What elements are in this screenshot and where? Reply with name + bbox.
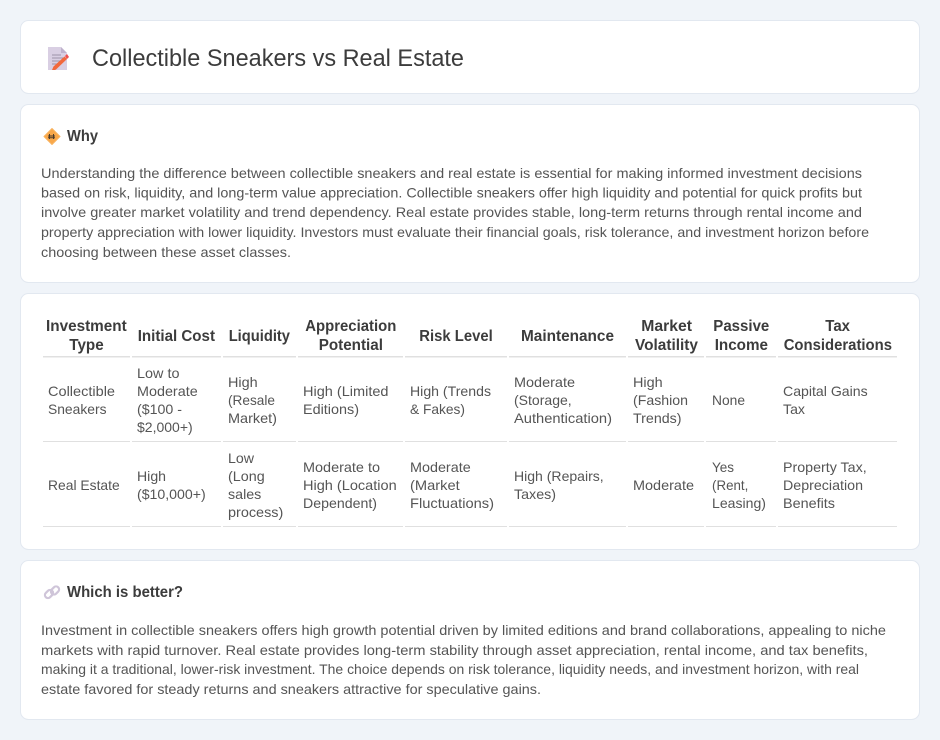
table row: real estate: Leasing) — [712, 495, 766, 511]
why paragraph: property appreciation with lower liquidity. Investors must evaluate their financial goals, risk tolerance, and investment horizon before — [41, 224, 869, 240]
table row: real estate: Real Estate — [48, 477, 120, 493]
table rules — [43, 356, 897, 527]
table header row: Market — [641, 318, 693, 335]
icon: memo with pencil — [48, 47, 69, 70]
table row: collectible sneakers: Authentication) — [514, 410, 612, 426]
table row: collectible sneakers: (Resale — [228, 392, 275, 408]
table row: real estate: Moderate to — [303, 459, 380, 475]
table row: collectible sneakers: (Fashion — [633, 392, 688, 408]
table row: real estate: (Rent, — [712, 477, 748, 493]
table row: real estate: Depreciation — [783, 477, 863, 493]
table header row: Passive — [713, 318, 769, 335]
table header row: Investment — [46, 318, 127, 335]
table row: collectible sneakers: (Storage, — [514, 392, 572, 408]
table header row: Appreciation — [305, 318, 396, 335]
table row: collectible sneakers: Market) — [228, 410, 277, 426]
table row: real estate: Low — [228, 450, 255, 466]
table row: real estate: Property Tax, — [783, 459, 867, 475]
table row: collectible sneakers: Sneakers — [48, 401, 106, 417]
table row: real estate: (Long — [228, 468, 265, 484]
table row: collectible sneakers: ($100 - — [137, 401, 182, 417]
table row: collectible sneakers: Collectible — [48, 383, 115, 399]
table row: real estate: Yes — [712, 459, 734, 475]
why paragraph: choosing between these asset classes. — [41, 244, 291, 260]
panel: which is better — [20, 560, 920, 720]
table row: real estate: High (Repairs, — [514, 468, 604, 484]
table row: collectible sneakers: High (Trends — [410, 383, 491, 399]
table row: real estate: process) — [228, 504, 283, 520]
why paragraph: based on risk, liquidity, and long-term value appreciation. Collectible sneakers offer high liquidity and potential for quick profits but — [41, 184, 862, 200]
heading: which is better: Which is better? — [67, 584, 183, 601]
table row: real estate: sales — [228, 486, 261, 502]
table row: collectible sneakers: Moderate — [514, 374, 575, 390]
icon: orange diamond sign — [44, 128, 60, 144]
table row: real estate: Benefits — [783, 495, 835, 511]
panel: title — [20, 20, 920, 94]
which is better paragraph — [41, 622, 886, 697]
why paragraph — [41, 165, 869, 260]
table row: real estate: Taxes) — [514, 486, 556, 502]
table row: collectible sneakers: Trends) — [633, 410, 682, 426]
table header row: Risk Level — [419, 328, 493, 345]
table header row: Volatility — [635, 337, 698, 354]
table header row: Considerations — [784, 337, 892, 354]
which is better paragraph: Investment in collectible sneakers offers high growth potential driven by limited editions and brand collaborations, appealing to niche — [41, 622, 886, 638]
which is better paragraph: making it a traditional, lower-risk investment. The choice depends on risk tolerance, liquidity needs, and investment horizon, with real — [41, 661, 859, 677]
table header row: Liquidity — [229, 328, 290, 345]
table row: real estate: ($10,000+) — [137, 486, 206, 502]
table row: collectible sneakers: None — [712, 392, 745, 408]
table row: collectible sneakers: Moderate — [137, 383, 198, 399]
table header row: Initial Cost — [138, 328, 216, 345]
table row: real estate: Dependent) — [303, 495, 377, 511]
table row: collectible sneakers: High (Limited — [303, 383, 388, 399]
heading: why: Why — [67, 128, 98, 145]
table row: collectible sneakers: Capital Gains — [783, 383, 868, 399]
table header row: Maintenance — [521, 328, 614, 345]
title text: Collectible Sneakers vs Real Estate — [92, 45, 464, 72]
table header row: Type — [69, 337, 104, 354]
why paragraph: Understanding the difference between collectible sneakers and real estate is essential for making informed investment decisions — [41, 165, 862, 181]
table header row: Tax — [825, 318, 850, 335]
which is better paragraph: estate favored for steady returns and sneakers attractive for speculative gains. — [41, 681, 541, 697]
table row: real estate: Moderate — [633, 477, 694, 493]
table row: collectible sneakers: $2,000+) — [137, 419, 193, 435]
which is better paragraph: markets with rapid turnover. Real estate provides long-term stability through asset appreciation, rental income, and tax benefits, — [41, 642, 868, 658]
table row: collectible sneakers: Editions) — [303, 401, 359, 417]
table row: real estate: High — [137, 468, 166, 484]
table row: real estate: Moderate — [410, 459, 471, 475]
table header row: Income — [715, 337, 768, 354]
table row: collectible sneakers: Tax — [783, 401, 805, 417]
table row: collectible sneakers: High — [633, 374, 663, 390]
why paragraph: involve greater market volatility and trend dependency. Real estate provides stable, long-term returns through rental income and — [41, 204, 862, 220]
panel: comparison table — [20, 294, 920, 550]
table row: collectible sneakers: High — [228, 374, 258, 390]
table row: collectible sneakers — [48, 365, 868, 435]
table row: real estate — [48, 450, 867, 520]
table row: collectible sneakers: & Fakes) — [410, 401, 465, 417]
table header row: Potential — [319, 337, 383, 354]
panel: why — [20, 104, 920, 282]
table row: real estate: (Market — [410, 477, 460, 493]
table row: real estate: High (Location — [303, 477, 397, 493]
icon: link — [44, 585, 60, 599]
table header row — [46, 318, 892, 354]
table row: collectible sneakers: Low to — [137, 365, 180, 381]
table row: real estate: Fluctuations) — [410, 495, 494, 511]
